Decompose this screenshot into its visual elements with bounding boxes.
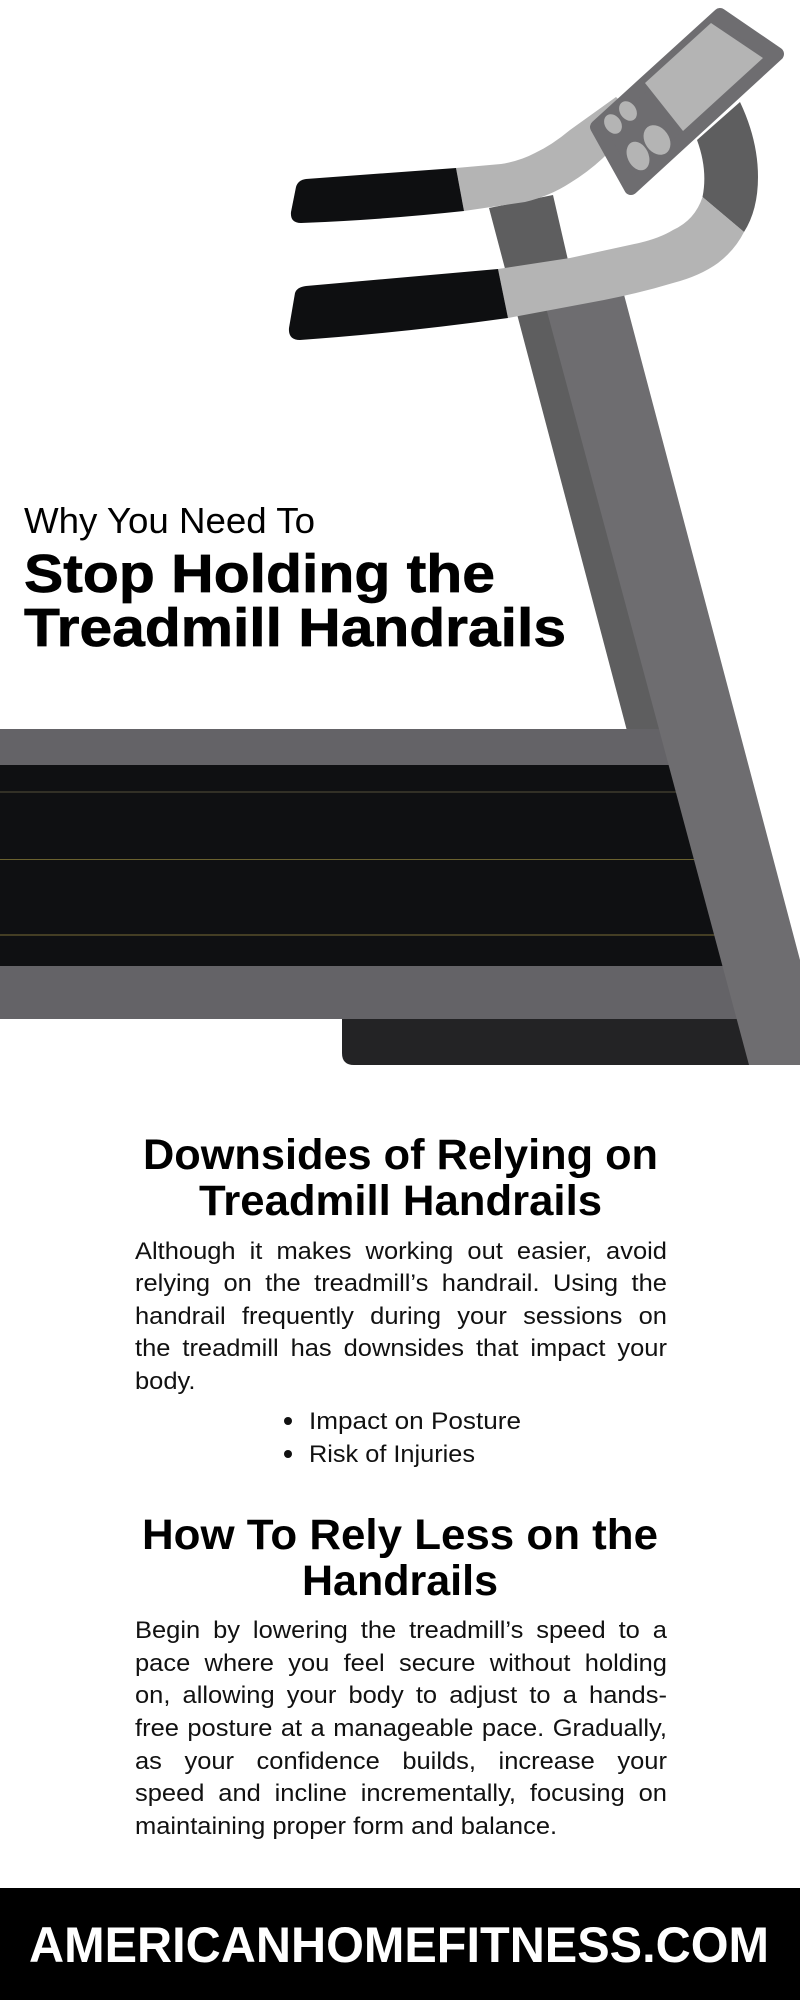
paragraph: downsides (134, 1238, 667, 1395)
title line 1: Stop Holding the (24, 544, 495, 604)
deck bottom rail (0, 966, 760, 1019)
title kicker: Why You Need To (24, 500, 315, 541)
paragraph: downsides: the treadmill has downsides that impact your (134, 1335, 666, 1362)
bullet: risk of injuries: Risk of Injuries (309, 1441, 475, 1468)
upper handrail grip (291, 168, 464, 223)
paragraph: downsides: relying on the treadmill’s handrail. Using the (134, 1270, 666, 1297)
paragraph: how to rely less: maintaining proper form and balance. (134, 1813, 557, 1840)
running belt (0, 765, 740, 966)
heading: downsides: Downsides of Relying on (143, 1131, 658, 1179)
paragraph: how to rely less: free posture at a manageable pace. Gradually, (134, 1715, 666, 1742)
upper handrail bar (456, 97, 640, 211)
paragraph: how to rely less: as your confidence builds, increase your (134, 1748, 666, 1775)
console panel (597, 15, 777, 188)
motor base (342, 1019, 760, 1065)
paragraph: downsides: Although it makes working out easier, avoid (134, 1238, 666, 1265)
console screen (645, 23, 763, 131)
heading: how to rely less (142, 1511, 658, 1605)
front upright column (541, 272, 800, 1065)
deck top rail (0, 729, 700, 765)
footer website: AMERICANHOMEFITNESS.COM (29, 1917, 769, 1973)
paragraph: how to rely less: speed and incline incrementally, focusing on (134, 1780, 666, 1807)
bullet list (284, 1408, 521, 1468)
belt stripes (0, 792, 730, 936)
treadmill illustration (0, 15, 800, 1065)
footer band (0, 1888, 800, 2000)
rear upright column (489, 195, 670, 740)
heading: downsides (143, 1131, 658, 1225)
heading: downsides: Treadmill Handrails (199, 1177, 602, 1225)
paragraph: downsides: body. (134, 1368, 195, 1395)
paragraph: how to rely less (134, 1617, 667, 1840)
console arm (697, 102, 758, 232)
lower handrail bar (498, 197, 744, 318)
title (24, 500, 566, 658)
title line 2: Treadmill Handrails (24, 598, 566, 658)
bullet: impact on posture: Impact on Posture (309, 1408, 521, 1435)
paragraph: how to rely less: on, allowing your body to adjust to a hands- (134, 1682, 666, 1709)
console buttons (600, 98, 676, 174)
lower handrail grip (289, 269, 508, 340)
paragraph: downsides: handrail frequently during your sessions on (134, 1303, 666, 1330)
paragraph: how to rely less: Begin by lowering the treadmill’s speed to a (134, 1617, 666, 1644)
paragraph: how to rely less: pace where you feel secure without holding (134, 1650, 666, 1677)
heading: how to rely less: How To Rely Less on the (142, 1511, 658, 1559)
heading: how to rely less: Handrails (302, 1557, 498, 1605)
